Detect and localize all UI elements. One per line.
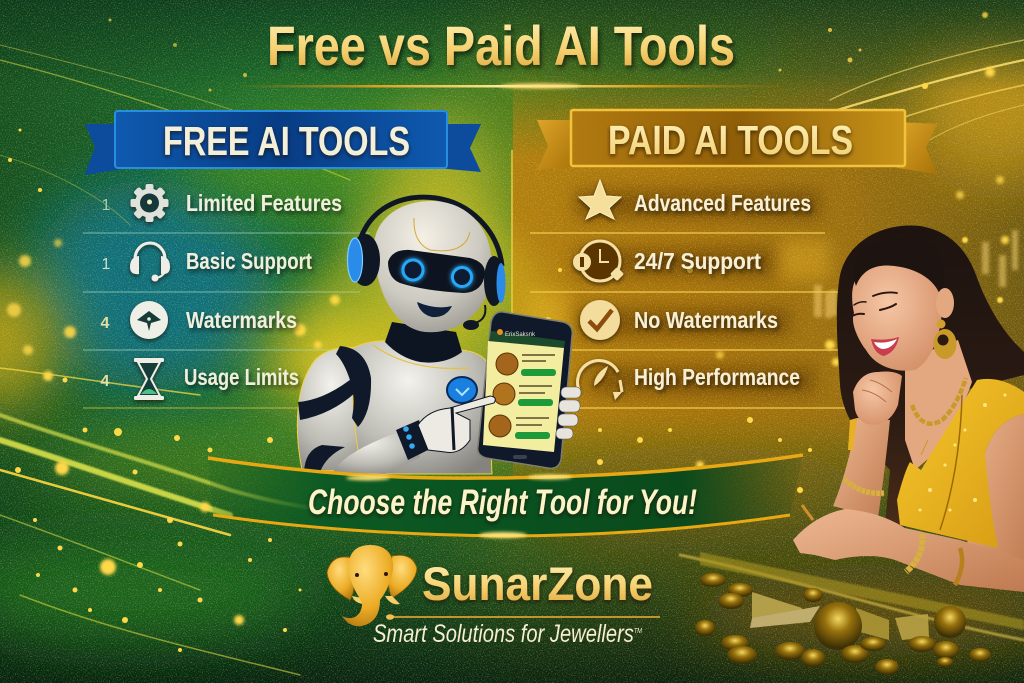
- elephant tusks: [352, 596, 365, 604]
- ribbon tail left: [537, 120, 575, 170]
- necklace: [912, 378, 966, 424]
- banner top rule: [208, 455, 803, 478]
- ribbon tail right: [897, 122, 937, 174]
- row: basic support: [102, 243, 312, 282]
- row number: 1: [102, 197, 111, 214]
- earring: [934, 320, 956, 359]
- elephant eyes: [355, 573, 359, 577]
- phone home button: [513, 455, 527, 459]
- sleeve behind forearm: [848, 418, 857, 450]
- dress: [897, 379, 1024, 548]
- pointing forearm: [333, 428, 420, 474]
- gold ledge bars: [700, 552, 1024, 630]
- tagline: TM: [634, 628, 642, 635]
- ribbon label: PAID AI TOOLS: [608, 117, 853, 163]
- ribbon body: [115, 111, 447, 168]
- smile: [871, 337, 899, 356]
- label: Advanced Features: [634, 190, 811, 216]
- neck and chest: [905, 340, 972, 470]
- pointing hand: [418, 396, 495, 452]
- label: Basic Support: [186, 248, 312, 274]
- row number: 4: [101, 373, 110, 390]
- wordmark: SunarZone: [422, 557, 653, 610]
- icon: gear: [130, 184, 168, 222]
- icon: watermark badge: [130, 301, 168, 339]
- label: High Performance: [634, 364, 800, 390]
- logo rule: [386, 614, 660, 620]
- banner text: Choose the Right Tool for You!: [308, 483, 697, 522]
- row: no watermarks: [580, 300, 778, 340]
- row number: 1: [102, 256, 111, 273]
- visor: [388, 250, 485, 293]
- woman illustration: [793, 225, 1024, 592]
- phone list items: [489, 353, 556, 439]
- row number: 4: [101, 315, 110, 332]
- pendant: [921, 440, 928, 455]
- glowing pillars (right background): [814, 230, 1018, 318]
- ribbon label: FREE AI TOOLS: [163, 118, 410, 164]
- row: usage limits: [101, 358, 299, 400]
- row dividers left: [83, 233, 370, 408]
- gold orbs: [695, 573, 991, 675]
- phone header bar: [489, 331, 565, 349]
- logo: SunarZone: [327, 545, 660, 648]
- row: 24/7 support: [573, 241, 761, 281]
- row: high performance: [578, 361, 800, 400]
- wrist band: [396, 420, 428, 460]
- label: Watermarks: [186, 307, 297, 333]
- robot shoulder and arm: [297, 347, 382, 472]
- elbow pad: [304, 445, 345, 472]
- panel: paid tools ribbon: [537, 110, 937, 174]
- left ear cup: [348, 234, 380, 286]
- shoulder strap: [336, 346, 371, 427]
- icon: speedometer: [578, 361, 622, 400]
- phone screen: [483, 341, 564, 452]
- microphone: [463, 305, 485, 330]
- logo icon: elephant: [327, 545, 417, 626]
- raised hand: [853, 372, 902, 425]
- robot eyes: [403, 260, 472, 286]
- panel: free tools ribbon: [85, 111, 481, 175]
- bright patch between paid rows: [530, 240, 830, 340]
- row dividers right: [530, 233, 845, 408]
- hair back: [837, 225, 1024, 530]
- elephant right ear: [388, 555, 417, 598]
- bottom right jewellery pile: [695, 552, 1024, 675]
- label: 24/7 Support: [634, 248, 761, 274]
- elephant left ear: [327, 557, 354, 600]
- head crease: [414, 218, 470, 251]
- right shoulder and arm: [960, 414, 1024, 590]
- icon: clock and magnifier: [573, 241, 624, 281]
- bangle right arm: [955, 548, 962, 585]
- raised forearm: [833, 418, 890, 518]
- icon: check badge: [580, 300, 620, 340]
- robot mouth: [417, 302, 452, 317]
- bangle left: [845, 479, 884, 493]
- title underline: [240, 84, 780, 88]
- row: watermarks: [101, 301, 297, 339]
- label: Limited Features: [186, 190, 342, 216]
- panel: free features list: [101, 184, 342, 400]
- label: No Watermarks: [634, 307, 778, 333]
- pen: [802, 505, 813, 520]
- robot torso: [352, 341, 492, 474]
- robot hand on phone: [556, 387, 581, 439]
- lower forearm and hand: [793, 509, 1024, 592]
- panel: paid features list: [573, 180, 811, 400]
- banner bottom rule: [213, 515, 790, 536]
- icon: hourglass: [134, 358, 164, 400]
- right ear cup: [484, 256, 506, 306]
- label: Usage Limits: [184, 364, 299, 390]
- tagline: Smart Solutions for Jewellers: [373, 620, 697, 648]
- phone: [478, 312, 572, 468]
- elephant head and trunk: [342, 545, 393, 626]
- face: [852, 266, 942, 371]
- headphone band: [360, 197, 502, 266]
- title: Free vs Paid AI Tools: [267, 14, 735, 77]
- ribbon body: [571, 110, 905, 166]
- bracelet right wrist: [906, 534, 922, 572]
- robot glow: [305, 205, 555, 475]
- row: advanced features: [579, 180, 811, 219]
- icon: star: [579, 180, 621, 219]
- brown shading behind paid rows: [575, 190, 820, 394]
- dress sequins: [918, 394, 1006, 512]
- chest badge: [447, 377, 477, 403]
- banner body: [208, 455, 803, 536]
- ear: [936, 288, 954, 318]
- robot head: [374, 201, 492, 332]
- row: limited features: [102, 184, 342, 222]
- banner: call to action: [208, 455, 803, 538]
- notes and packets: [750, 592, 929, 640]
- sari drape line: [940, 395, 962, 530]
- centre divider: [511, 150, 513, 430]
- ribbon tail right: [437, 124, 481, 172]
- robot illustration: [297, 197, 581, 475]
- ribbon tail left: [85, 124, 128, 175]
- banner highlights: [346, 474, 572, 538]
- robot neck: [385, 322, 462, 363]
- icon: headset: [130, 243, 170, 282]
- eyes and brows: [852, 292, 897, 316]
- phone header text: ErixSaksnk: [505, 332, 536, 338]
- hair parting: [854, 238, 944, 296]
